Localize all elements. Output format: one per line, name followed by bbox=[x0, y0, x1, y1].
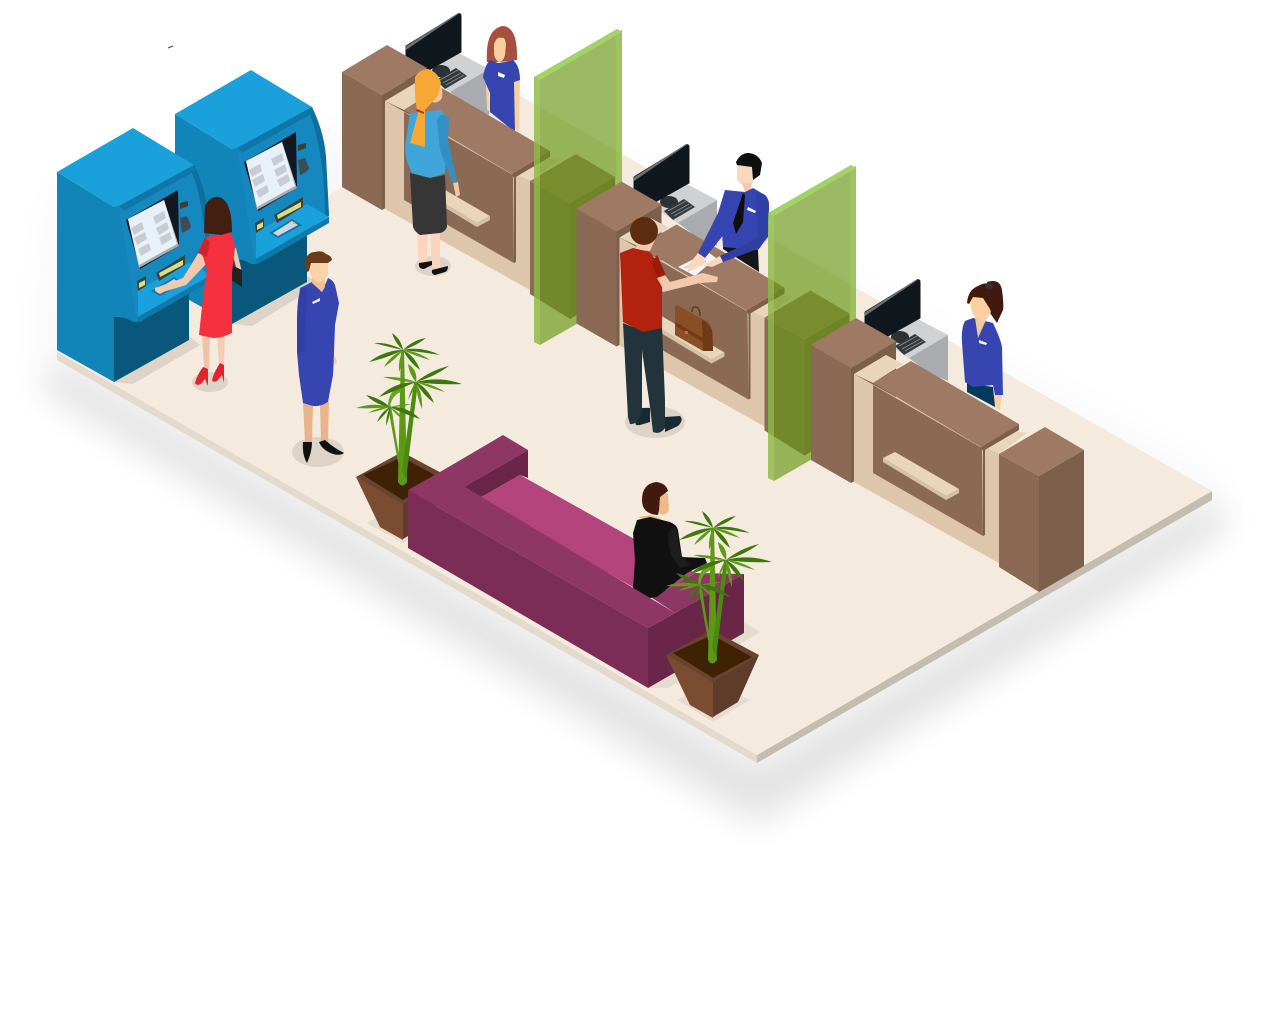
shadow of sofa and pots bbox=[367, 515, 760, 722]
counter 3 computer and desk bbox=[864, 279, 948, 381]
green glass divider 1 bbox=[534, 29, 622, 345]
woman in blue uniform standing bbox=[292, 251, 344, 467]
counter 1 end pillar bbox=[530, 154, 615, 319]
green glass divider 2 bbox=[768, 165, 856, 481]
counter 3 bbox=[811, 318, 1027, 563]
potted palm right bbox=[666, 511, 772, 718]
woman with orange hair at counter 1 bbox=[405, 69, 460, 276]
counter 2 bbox=[576, 182, 792, 426]
counter 2 computer and desk bbox=[633, 144, 717, 246]
shadows of ATMs on floor bbox=[114, 276, 320, 384]
staff man arms, paper and hands on counter 2 bbox=[678, 190, 768, 276]
staff woman with ponytail bbox=[962, 281, 1003, 410]
ATM front left bbox=[57, 128, 211, 382]
counter 1 bbox=[342, 45, 558, 290]
ATM back right bbox=[175, 70, 329, 324]
counter 2 end pillar bbox=[764, 290, 850, 456]
counter 1 computer and desk bbox=[405, 13, 489, 115]
floor drop shadow bbox=[40, 110, 1228, 825]
tiny mark bbox=[168, 46, 173, 48]
briefcase on shelf bbox=[675, 305, 713, 351]
potted palm left bbox=[356, 333, 462, 540]
floor slab bbox=[57, 90, 1212, 763]
woman at ATM in red dress bbox=[155, 197, 242, 392]
counter 3 end pillar bbox=[999, 427, 1084, 592]
staff man torso and head bbox=[722, 153, 769, 272]
man in red shirt at counter 2 bbox=[620, 217, 718, 438]
seated man in black suit bbox=[633, 482, 707, 598]
purple sofa bbox=[408, 435, 744, 688]
staff woman with red hair bbox=[483, 26, 520, 132]
